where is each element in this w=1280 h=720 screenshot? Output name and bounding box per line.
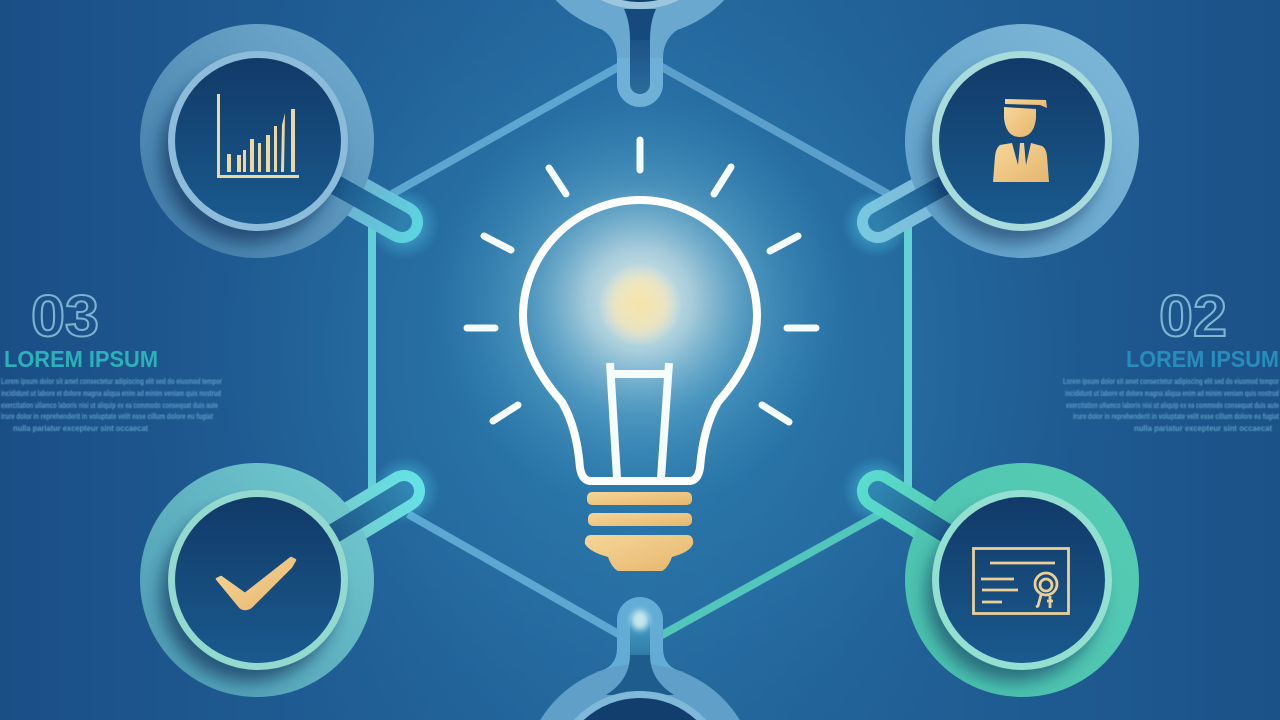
node glow: bottom-right junction — [842, 456, 910, 524]
icon: check mark — [217, 558, 295, 609]
node: bottom-right certificate circle — [878, 463, 1139, 697]
node: top circle (cropped) — [556, 0, 724, 107]
node glow: top-left junction — [368, 188, 440, 260]
body copy: incididunt ut labore et dolore magna aliqua enim ad minim veniam quis nostrud — [1, 389, 221, 398]
step number 02: 02 — [1159, 284, 1227, 349]
node: bottom circle (cropped) — [540, 597, 740, 720]
body copy — [1, 377, 222, 433]
central glow — [430, 90, 850, 510]
body copy: Lorem ipsum dolor sit amet consectetur adipiscing elit sed do eiusmod tempor — [1, 377, 222, 386]
node: top-right graduate circle — [878, 24, 1139, 258]
icon: certificate — [974, 548, 1068, 614]
step number 03: 03 — [31, 284, 99, 349]
icon: bar chart — [217, 94, 299, 178]
body copy: nulla pariatur excepteur sint occaecat — [13, 424, 148, 433]
body copy — [1063, 377, 1279, 433]
node glow: bottom-left junction — [372, 456, 440, 524]
body copy: irure dolor in reprehenderit in voluptate velit esse cillum dolore eu fugiat — [1, 412, 213, 421]
icon: graduate — [993, 99, 1049, 182]
text block: left — [1, 284, 222, 433]
light rays — [467, 140, 816, 422]
bulb core glow — [598, 263, 682, 347]
node: top-left chart circle — [140, 24, 402, 258]
node: bottom-left check circle — [140, 463, 404, 697]
heading: LOREM IPSUM — [4, 346, 158, 372]
screw base — [585, 492, 693, 571]
text block: right — [1063, 284, 1279, 433]
filament — [609, 363, 670, 478]
node glow: top-right junction — [842, 190, 910, 258]
body copy: exercitation ullamco laboris nisi ut aliquip ex ea commodo consequat duis aute — [1, 401, 218, 410]
hexagon connector lines — [372, 66, 908, 636]
light bulb — [523, 200, 757, 571]
body copy: nulla pariatur excepteur sint occaecat — [1134, 424, 1272, 433]
bulb outline — [523, 200, 757, 481]
